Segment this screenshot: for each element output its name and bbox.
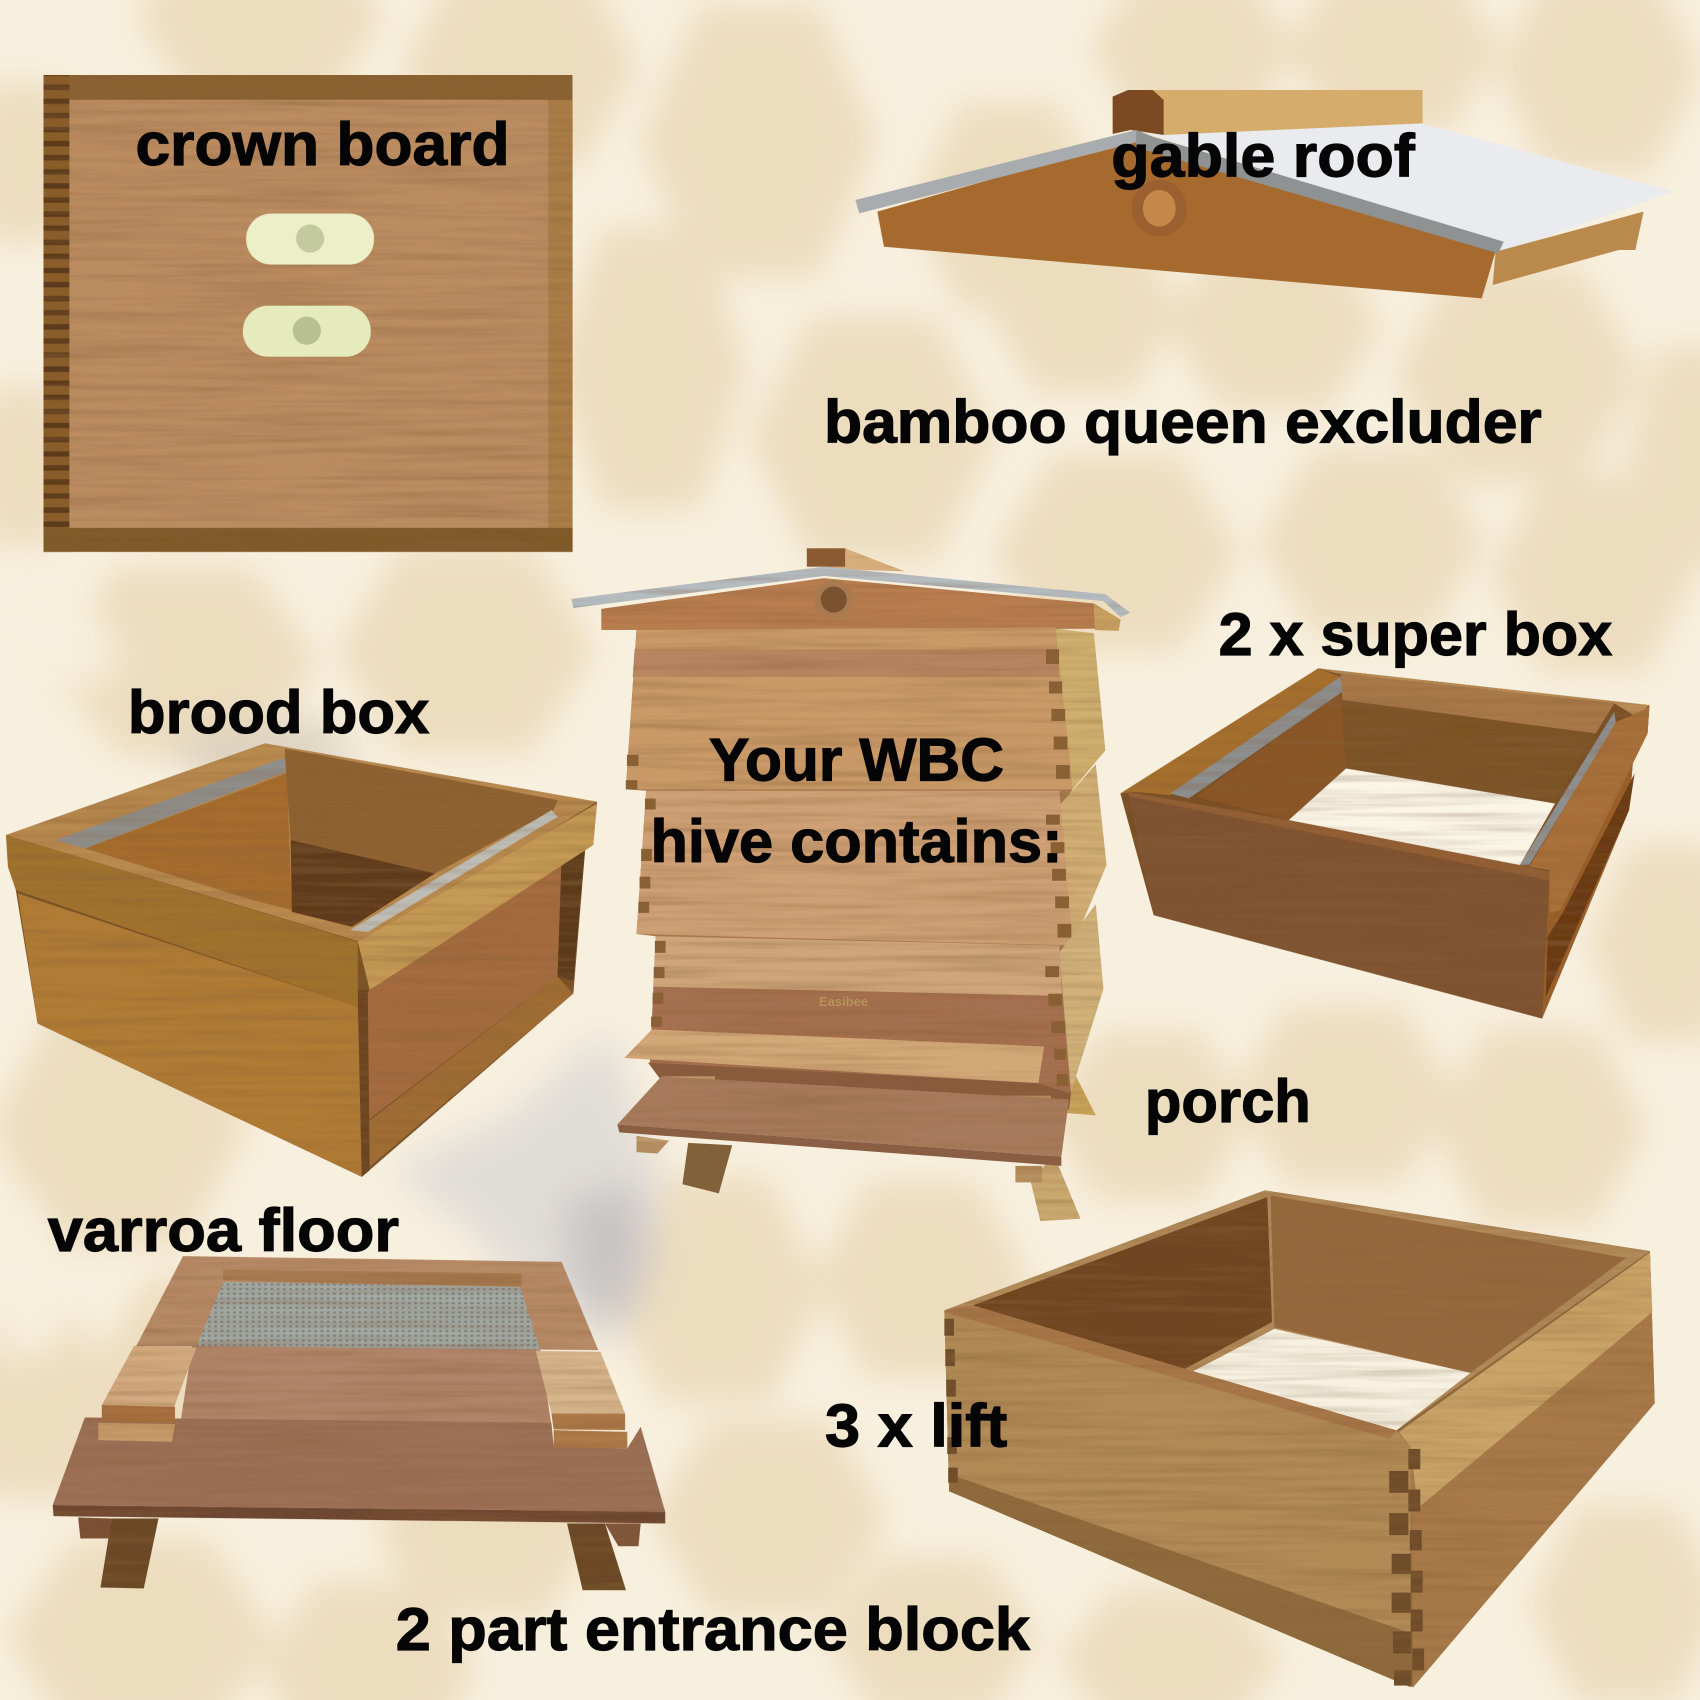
label: varroa floor: varroa floor (48, 1196, 399, 1264)
label: gable roof: gable roof (1111, 122, 1416, 190)
icon: upper bee escape (246, 214, 374, 265)
hive maker logo: Easibee (819, 994, 868, 1009)
panel: super box (1120, 668, 1649, 1018)
crown board bottom frame (43, 528, 572, 552)
label: 2 x super box: 2 x super box (1219, 600, 1612, 668)
panel: crown board (43, 75, 572, 552)
title: hive contains: (651, 807, 1062, 875)
crown board left frame (43, 75, 69, 552)
label: 3 x lift: 3 x lift (825, 1391, 1007, 1459)
title (651, 726, 1062, 875)
crown board plywood panel (69, 100, 549, 528)
label: 2 part entrance block: 2 part entrance block (396, 1595, 1030, 1663)
panel: varroa floor (53, 1256, 665, 1590)
panel: gable roof (855, 90, 1673, 298)
crown board right frame (549, 100, 572, 552)
panel: brood box (6, 743, 597, 1177)
label: porch: porch (1145, 1067, 1311, 1135)
panel: lift (944, 1190, 1655, 1687)
icon: lower bee escape (243, 306, 371, 357)
label: crown board: crown board (136, 110, 510, 178)
icon: hive vent (814, 580, 853, 619)
label: brood box: brood box (128, 678, 430, 746)
panel: central WBC hive (571, 548, 1130, 1221)
label: bamboo queen excluder: bamboo queen excluder (824, 387, 1542, 455)
title: Your WBC (709, 726, 1004, 794)
